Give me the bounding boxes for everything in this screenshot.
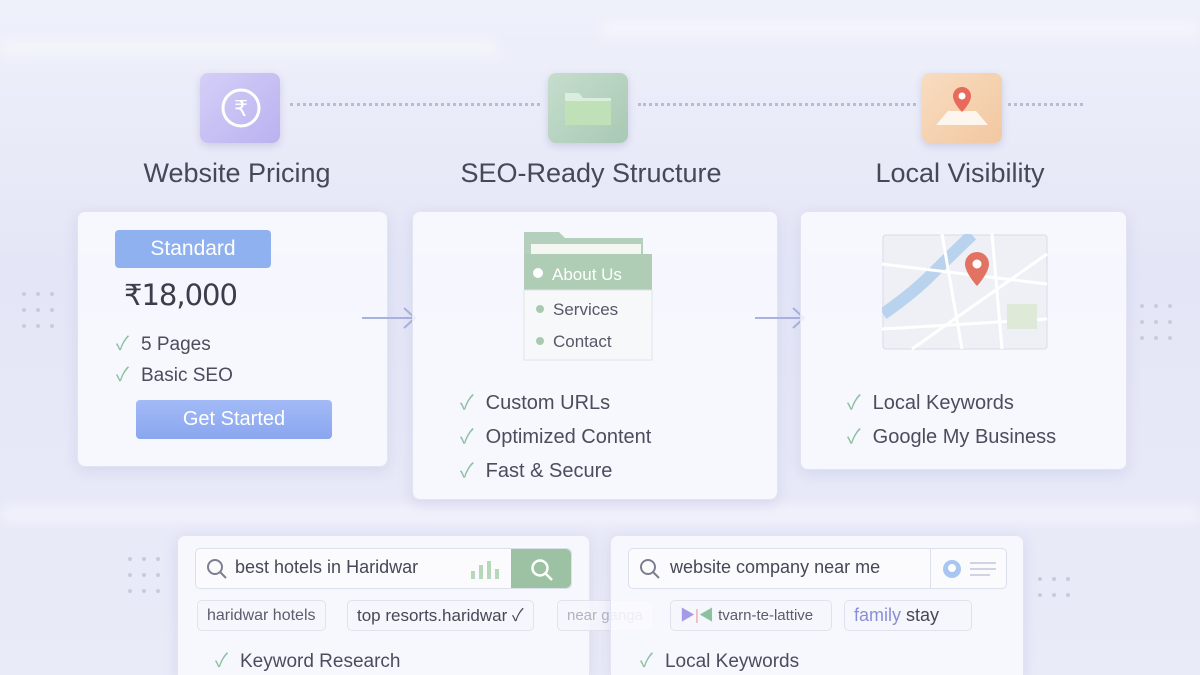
panel: local: ✓ Google My Business	[847, 426, 1056, 448]
panel: seo	[412, 211, 778, 500]
chips 1: haridwar hotels	[207, 607, 316, 624]
panel: seo: ✓ Fast & Secure	[460, 460, 612, 482]
list: ✓ Local Keywords	[847, 392, 1014, 414]
label: keyword research: ✓ Keyword Research	[215, 651, 401, 672]
badge: standard	[115, 230, 271, 268]
folder illustration: Contact	[553, 332, 612, 351]
map illustration	[882, 234, 1048, 350]
folder illustration	[524, 232, 652, 360]
search bar 2: website company near me	[670, 557, 880, 577]
heading: website pricing: Website Pricing	[143, 158, 331, 188]
price: ₹18,000	[124, 278, 237, 312]
text: near ganga	[567, 607, 643, 624]
chips 2: ▶|◀ tvarn-te-lattive	[680, 607, 813, 624]
label: local keywords: ✓ Local Keywords	[640, 651, 799, 672]
icon: map pin	[922, 73, 1002, 143]
folder illustration: Services	[553, 300, 618, 319]
panel: local keywords	[610, 535, 1024, 675]
list: ✓ 5 Pages	[116, 334, 211, 355]
panel: local	[800, 211, 1127, 470]
panel: keyword research	[177, 535, 590, 675]
panel: seo: ✓ Optimized Content	[460, 426, 651, 448]
chips 1	[197, 600, 326, 631]
search bar 1: best hotels in Haridwar	[235, 557, 418, 577]
heading: seo structure: SEO-Ready Structure	[460, 158, 722, 188]
search bar 2	[628, 548, 1007, 589]
chips 2	[670, 600, 832, 631]
button: get started: Get Started	[183, 408, 285, 430]
search bar 1	[195, 548, 572, 589]
text: top resorts.haridwar ✓	[357, 606, 524, 625]
badge: standard: Standard	[150, 237, 236, 260]
icon: rupee: ₹	[234, 97, 248, 122]
heading: local visibility: Local Visibility	[875, 158, 1045, 188]
text: family stay	[854, 605, 939, 625]
icon: rupee	[200, 73, 280, 143]
list: ✓ Custom URLs	[460, 392, 610, 414]
folder illustration: About Us	[552, 265, 622, 284]
arrow 1	[362, 307, 416, 329]
panel: pricing	[77, 211, 388, 467]
arrow 2	[755, 307, 805, 329]
button: get started	[136, 400, 332, 439]
panel: pricing: ✓ Basic SEO	[116, 365, 233, 386]
icon: folder	[548, 73, 628, 143]
